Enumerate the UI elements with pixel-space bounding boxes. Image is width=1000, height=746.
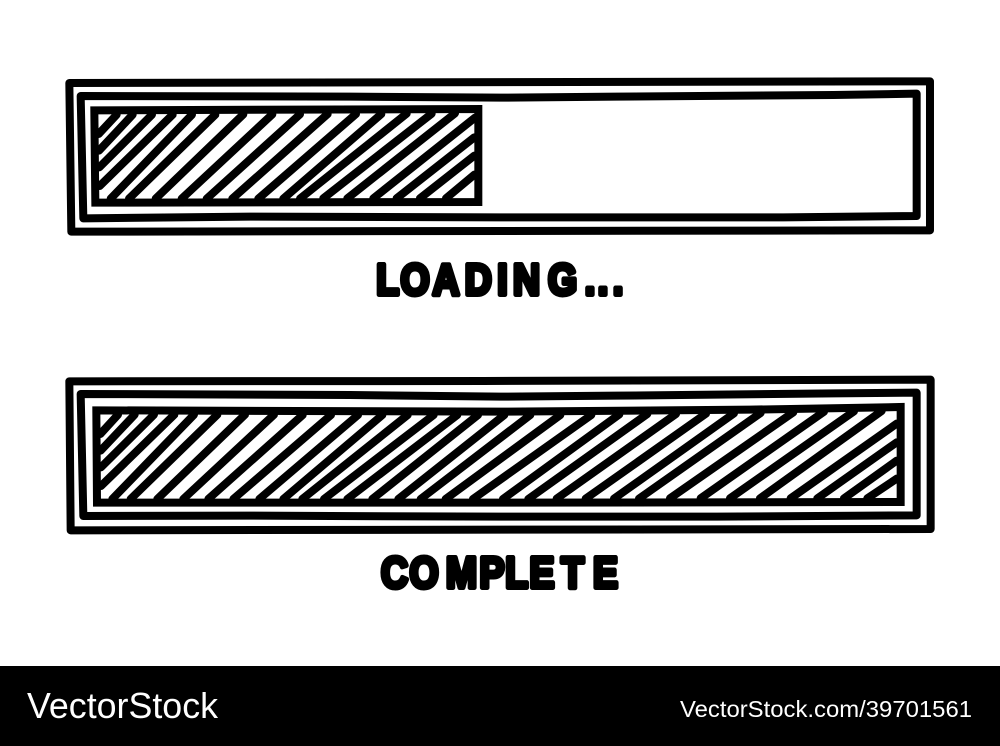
label: complete: COMPLETE (381, 548, 618, 597)
loading bar outer frame (69, 81, 930, 232)
loading progress bar (69, 81, 930, 232)
footer bar (0, 666, 1000, 746)
loading bar inner frame (81, 94, 917, 218)
complete bar outer frame (69, 380, 931, 530)
footer logo text: VectorStock (27, 685, 219, 726)
complete bar inner frame (81, 393, 917, 517)
label: loading: LOADING... (376, 255, 623, 304)
loading bar filled segment (94, 109, 478, 203)
complete progress bar (69, 380, 931, 530)
footer image id: VectorStock.com/39701561 (680, 696, 972, 722)
complete bar filled segment (96, 407, 901, 503)
